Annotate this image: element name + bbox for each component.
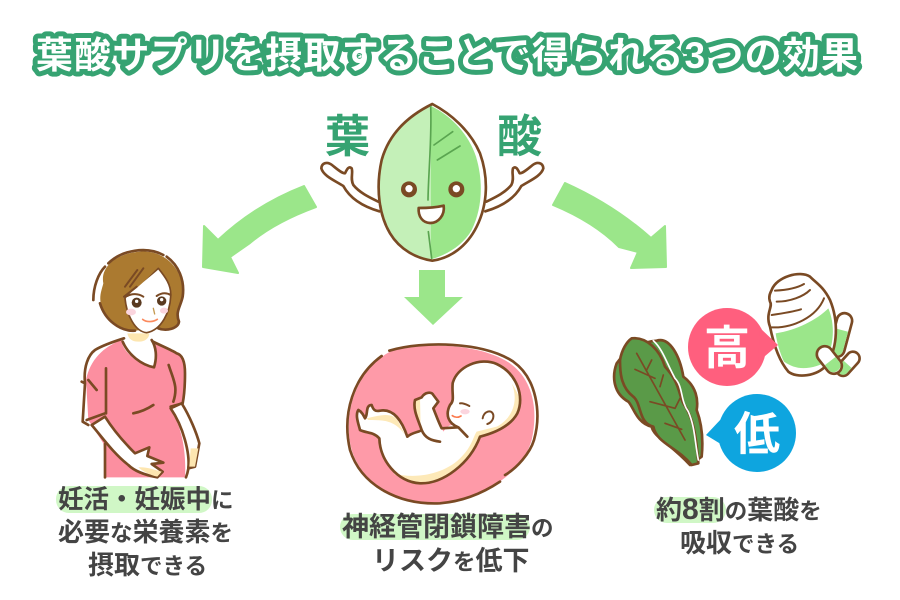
womb — [349, 346, 534, 503]
badge: 高: 高 — [704, 322, 750, 374]
text: right caption: 吸収できる — [680, 528, 799, 558]
shading — [393, 383, 520, 483]
text: left caption: 摂取できる — [88, 550, 207, 580]
outline — [357, 362, 520, 483]
text: center caption — [340, 512, 554, 576]
heading: 酸: 酸 — [497, 111, 542, 162]
leaf body — [379, 105, 432, 260]
heading: 葉: 葉 — [325, 111, 370, 162]
body — [86, 340, 185, 477]
arrow: left — [203, 186, 316, 273]
text: left caption — [56, 486, 234, 580]
text: left caption: 必要な栄養素を — [58, 517, 233, 547]
pill behind — [827, 311, 854, 359]
arrow: right — [553, 183, 666, 268]
front leaf — [620, 338, 698, 465]
illustration: leaf vegetable — [614, 338, 702, 465]
neck — [123, 333, 155, 367]
bottle — [768, 274, 836, 376]
baby body — [357, 362, 520, 483]
text: left caption: 妊活・妊娠中に — [58, 486, 234, 514]
illustration: supplement bottle — [768, 274, 862, 379]
hair — [100, 252, 183, 331]
text: center caption: リスクを低下 — [372, 546, 530, 576]
leaf character — [321, 104, 543, 261]
badge: 高 — [688, 308, 778, 386]
pills — [834, 349, 862, 379]
text: right caption — [654, 493, 822, 558]
mouth — [419, 206, 444, 223]
illustration: pregnant woman — [82, 250, 199, 477]
text: center caption: 神経管閉鎖障害の — [342, 512, 554, 542]
right arm — [485, 163, 543, 211]
badge: 低: 低 — [734, 408, 780, 460]
arms — [92, 417, 163, 477]
left arm — [321, 163, 379, 211]
illustration: fetus — [347, 344, 537, 503]
title: 葉酸サプリを摂取することで得られる3つの効果 — [36, 35, 858, 76]
eyes — [132, 298, 142, 308]
arrow: down — [404, 270, 463, 325]
eyes — [401, 181, 417, 197]
back leaf — [614, 340, 702, 465]
badge: 低 — [706, 394, 796, 472]
text: right caption: 約8割の葉酸を — [656, 493, 822, 526]
face — [125, 268, 171, 333]
